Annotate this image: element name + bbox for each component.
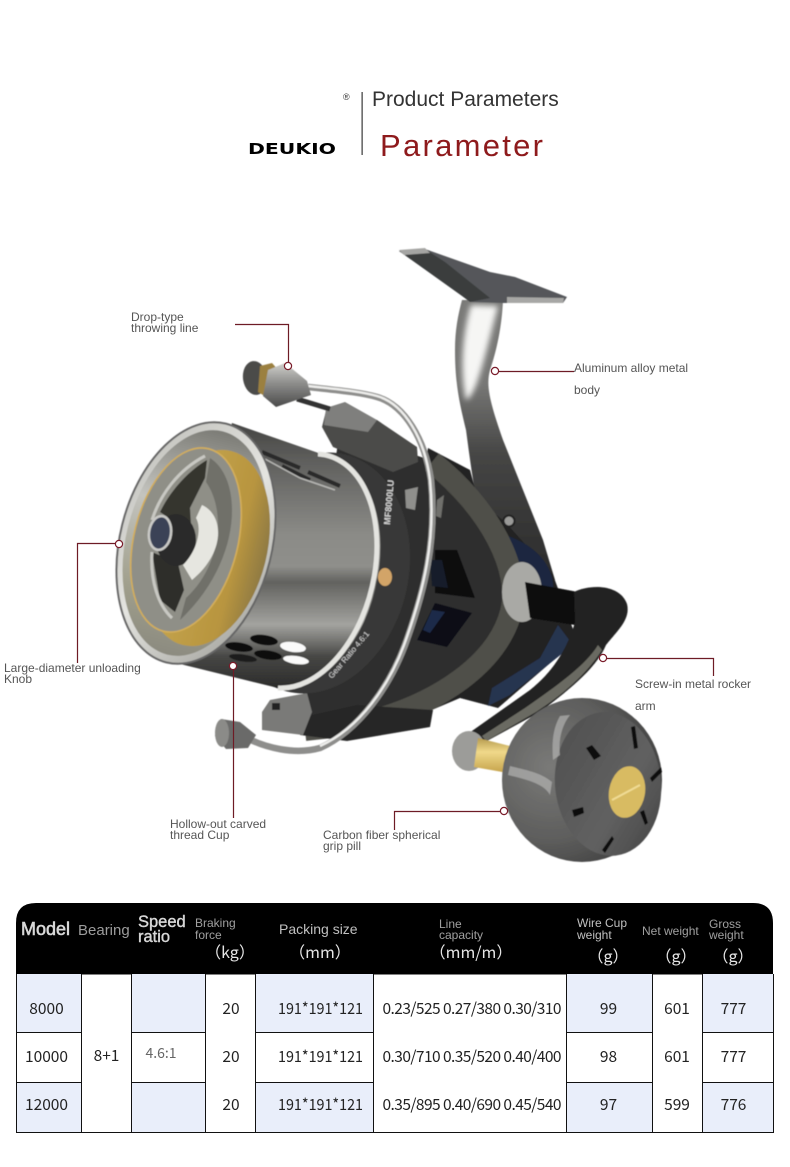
label text: Drop-type bbox=[131, 310, 184, 324]
inner dark sectors bbox=[160, 460, 207, 540]
callout: drop-type throwing line bbox=[131, 310, 292, 370]
ball highlight bbox=[508, 715, 570, 795]
header labels: （g） bbox=[655, 943, 697, 967]
ball face bbox=[548, 707, 668, 861]
bail wire bbox=[245, 386, 433, 751]
leader line bbox=[232, 670, 234, 818]
header labels: Packing size bbox=[279, 921, 358, 937]
label text: Knob bbox=[4, 672, 32, 686]
header labels: Model bbox=[21, 919, 70, 939]
header labels: Wire Cup bbox=[577, 916, 627, 930]
row: 8000: 601 bbox=[664, 997, 690, 1019]
parameter table bbox=[16, 903, 774, 1132]
row: 8000 bbox=[29, 997, 746, 1019]
model and ratio print on ring bbox=[327, 479, 396, 680]
header labels: Line bbox=[439, 917, 462, 931]
label text: arm bbox=[635, 699, 656, 713]
spool flange bbox=[93, 405, 299, 681]
label text: Screw-in metal rocker bbox=[635, 677, 751, 691]
header labels: Speed bbox=[138, 913, 186, 931]
label text: grip pill bbox=[323, 839, 361, 853]
row: 10000: 0.30/710 0.35/520 0.40/400 bbox=[382, 1045, 562, 1067]
header labels: （g） bbox=[712, 943, 754, 967]
tinted table cells bbox=[16, 974, 773, 1132]
row: 12000 bbox=[25, 1093, 746, 1115]
silver spokes bbox=[152, 456, 205, 618]
blue hub bbox=[147, 515, 173, 551]
header labels: weight bbox=[708, 928, 744, 942]
leader line bbox=[607, 658, 714, 676]
table grid lines bbox=[16, 974, 774, 1132]
header labels: force bbox=[195, 928, 222, 942]
spool rim highlight bbox=[278, 454, 377, 688]
row: 12000: 191*191*121 bbox=[278, 1093, 363, 1115]
label text: Large-diameter unloading bbox=[4, 661, 141, 675]
spool body bbox=[172, 423, 380, 688]
silver grip stem bbox=[452, 731, 486, 771]
spool top slots bbox=[262, 452, 340, 490]
row: 12000: 0.35/895 0.40/690 0.45/540 bbox=[382, 1093, 562, 1115]
rotor interior with spokes bbox=[300, 430, 507, 722]
lower bail cylinder bbox=[215, 719, 256, 749]
row: 8000: 191*191*121 bbox=[278, 997, 363, 1019]
merged cell: bearing 8+1: 8+1 bbox=[94, 1044, 119, 1066]
upper bail arm bbox=[297, 399, 418, 472]
spool inner face bbox=[113, 436, 259, 644]
illustration: spinning fishing reel bbox=[93, 248, 668, 862]
leader line bbox=[394, 812, 500, 830]
row: 12000: 599 bbox=[664, 1093, 690, 1115]
header block bbox=[248, 88, 559, 163]
header labels: Bearing bbox=[78, 922, 130, 939]
row: 8000: 777 bbox=[721, 997, 746, 1019]
row: 12000: 20 bbox=[222, 1093, 240, 1115]
row: 10000 bbox=[25, 1045, 746, 1067]
reel stem and foot bbox=[399, 248, 567, 580]
row: 8000: 99 bbox=[600, 997, 617, 1019]
label text: Carbon fiber spherical bbox=[323, 828, 440, 842]
label text: body bbox=[574, 383, 600, 397]
callout: screw-in metal rocker arm bbox=[599, 654, 751, 713]
leader line bbox=[499, 370, 574, 372]
callout: carbon fiber spherical grip pill bbox=[323, 807, 508, 853]
row: 10000: 20 bbox=[222, 1045, 240, 1067]
rotor band bbox=[305, 462, 513, 730]
callout: hollow-out carved thread cup bbox=[170, 662, 266, 842]
heading: Product Parameters: Product Parameters bbox=[372, 88, 559, 111]
header labels bbox=[21, 913, 754, 967]
header labels: Braking bbox=[195, 916, 236, 930]
outer gray crescent bbox=[180, 458, 232, 620]
label text: Hollow-out carved bbox=[170, 817, 266, 831]
spool carved slots bbox=[225, 633, 309, 666]
screw-in rocker arm bbox=[462, 587, 628, 748]
rocker arm highlight bbox=[482, 645, 602, 741]
header labels: capacity bbox=[439, 928, 483, 942]
gold grip collar bbox=[474, 738, 510, 773]
gold end cap bbox=[605, 763, 649, 821]
row: 8000: 20 bbox=[222, 997, 240, 1019]
grip vents bbox=[572, 726, 662, 853]
row: 12000: 97 bbox=[600, 1093, 617, 1115]
line roller knob bbox=[241, 359, 311, 407]
header labels: ratio bbox=[138, 928, 170, 946]
row: 10000: 777 bbox=[721, 1045, 746, 1067]
label text: Aluminum alloy metal bbox=[574, 361, 688, 375]
leader line bbox=[78, 544, 115, 663]
header labels: weight bbox=[576, 928, 612, 942]
header labels: （kg） bbox=[205, 939, 255, 963]
handle shaft and collar bbox=[502, 562, 590, 625]
header labels: （mm） bbox=[289, 939, 351, 963]
row: 12000: 776 bbox=[721, 1093, 746, 1115]
row: 10000: 191*191*121 bbox=[278, 1045, 363, 1067]
table header bar bbox=[16, 903, 773, 974]
model and ratio print on ring: MF8000LU bbox=[382, 479, 396, 525]
heading: Parameter: Parameter bbox=[380, 128, 543, 163]
leader line bbox=[235, 324, 288, 362]
merged cell: speed ratio 4.6:1: 4.6:1 bbox=[145, 1043, 177, 1063]
brass rim pin bbox=[378, 568, 392, 586]
label text: thread Cup bbox=[170, 828, 230, 842]
lower bail block bbox=[262, 693, 433, 741]
label text: throwing line bbox=[131, 321, 199, 335]
callout: large-diameter unloading knob bbox=[4, 540, 141, 686]
outer spool ring bbox=[197, 432, 435, 714]
row: 10000: 601 bbox=[664, 1045, 690, 1067]
registered mark: ® bbox=[343, 92, 350, 102]
model and ratio print on ring: Gear Ratio 4.6:1 bbox=[327, 629, 372, 680]
header labels: Gross bbox=[709, 917, 741, 931]
reel housing bbox=[400, 448, 577, 715]
header labels: （g） bbox=[587, 943, 629, 967]
inner crescent highlight bbox=[183, 505, 218, 580]
header divider bbox=[362, 92, 363, 155]
row: 8000: 0.23/525 0.27/380 0.30/310 bbox=[382, 997, 562, 1019]
callout: aluminum alloy metal body bbox=[491, 361, 688, 397]
header labels: Net weight bbox=[642, 924, 699, 938]
gold spool lip bbox=[125, 436, 289, 660]
row: 10000: 10000 bbox=[25, 1045, 68, 1067]
handle grip ball bbox=[452, 698, 668, 862]
row: 10000: 98 bbox=[600, 1045, 617, 1067]
row: 12000: 12000 bbox=[25, 1093, 68, 1115]
row: 8000: 8000 bbox=[29, 997, 64, 1019]
logo: DEUKIO: DEUKIO bbox=[248, 140, 336, 158]
header labels: （mm/m） bbox=[430, 939, 512, 963]
